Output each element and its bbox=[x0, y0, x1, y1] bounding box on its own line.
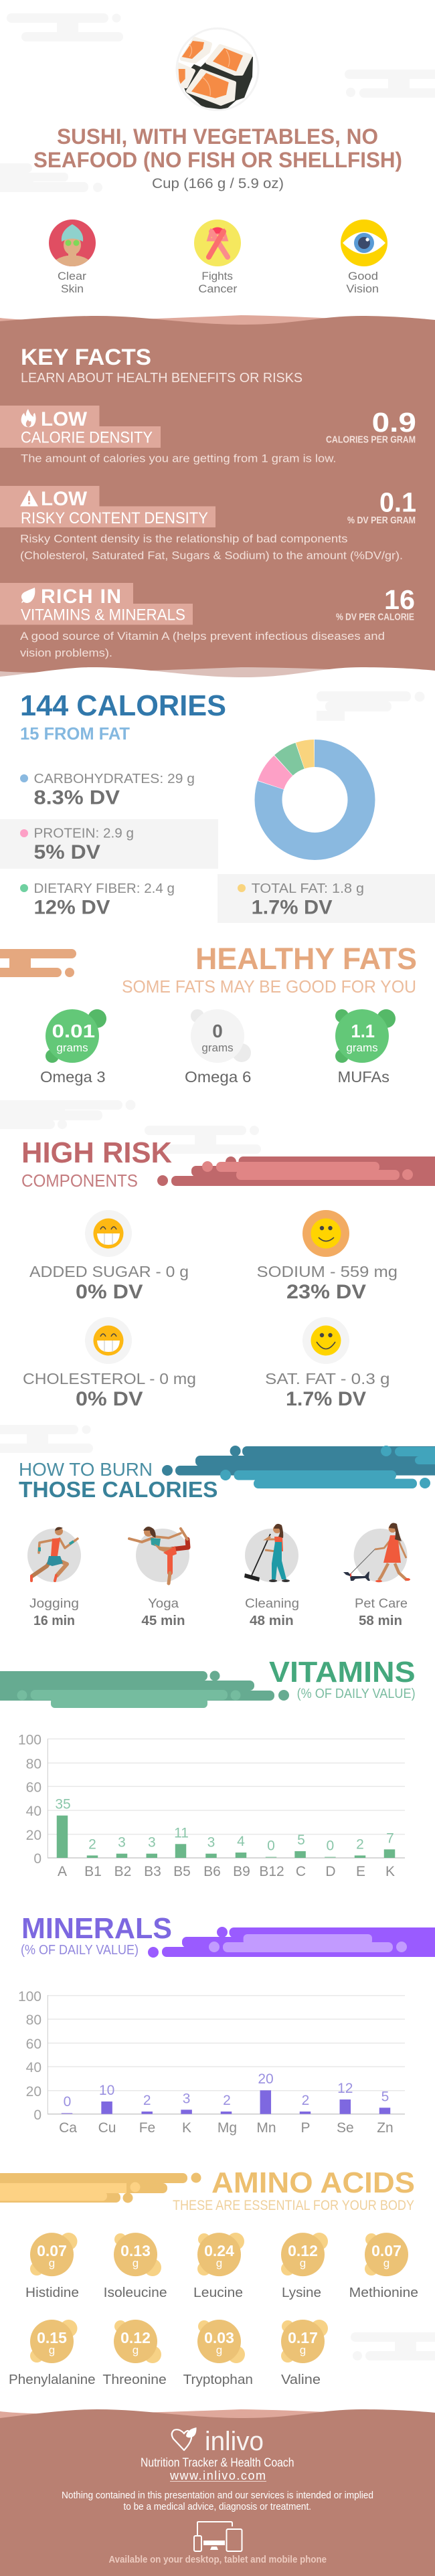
bar chart: vitamins: 60 bbox=[26, 1780, 41, 1795]
tagline: Nutrition Tracker & Health Coach bbox=[141, 2456, 294, 2470]
bar chart: vitamins: 11 bbox=[174, 1825, 189, 1840]
badge: omega 6 bbox=[185, 1009, 252, 1086]
badge: tryptophan: g bbox=[216, 2344, 222, 2356]
activity: cleaning bbox=[244, 1524, 299, 1628]
bar chart: vitamins: 0 bbox=[267, 1838, 275, 1853]
benefit: clear skin: Clear bbox=[58, 270, 86, 282]
background cloud: amino section bbox=[351, 2332, 435, 2360]
heading: minerals: MINERALS bbox=[21, 1912, 172, 1945]
bar chart: vitamins: 80 bbox=[26, 1756, 41, 1772]
background clouds: high risk bbox=[0, 1100, 261, 1154]
heading: high risk: HIGH RISK bbox=[21, 1136, 172, 1169]
activity: cleaning: 48 min bbox=[250, 1614, 294, 1628]
bar chart: vitamins: A bbox=[58, 1864, 67, 1879]
badge: MUFAs bbox=[335, 1009, 396, 1086]
fact: low risky content density: LOW bbox=[41, 488, 88, 510]
bar chart: vitamins: 3 bbox=[148, 1835, 156, 1851]
item: cholesterol: 0% DV bbox=[76, 1388, 143, 1410]
fact: low calorie density: CALORIES PER GRAM bbox=[326, 434, 416, 446]
badge: isoleucine: 0.13 bbox=[120, 2242, 151, 2259]
banner shape: orange bbox=[0, 949, 76, 977]
fact: rich in vitamins and minerals: vision problems). bbox=[20, 647, 112, 659]
item: cholesterol bbox=[23, 1317, 196, 1410]
nutrient shaded rows bbox=[0, 819, 435, 923]
badge: MUFAs: grams bbox=[346, 1041, 378, 1054]
badge: MUFAs: MUFAs bbox=[337, 1068, 389, 1086]
panel: calories bbox=[0, 690, 435, 923]
panel: vitamins bbox=[0, 1656, 416, 1879]
bar chart: minerals: Cu bbox=[98, 2120, 116, 2136]
bar chart: minerals: 10 bbox=[99, 2083, 114, 2098]
background cloud: burn section bbox=[0, 1425, 93, 1453]
bar chart: minerals: 20 bbox=[258, 2071, 274, 2087]
fact: low risky content density: RISKY CONTENT DENSITY bbox=[21, 509, 208, 527]
disclaimer: to be a medical advice, diagnosis or treatment. bbox=[123, 2502, 311, 2512]
legend: total fat: TOTAL FAT: 1.8 g bbox=[252, 881, 364, 896]
bar chart: minerals: Fe bbox=[139, 2120, 155, 2136]
bar chart: vitamins bbox=[18, 1732, 405, 1879]
bar chart: minerals: 20 bbox=[26, 2084, 41, 2099]
panel: footer bbox=[0, 2409, 435, 2576]
bar chart: vitamins: 35 bbox=[55, 1797, 71, 1812]
legend: total fat: 1.7% DV bbox=[252, 897, 333, 919]
badge: MUFAs: 1.1 bbox=[351, 1021, 375, 1041]
badge: methionine: g bbox=[383, 2257, 389, 2269]
fact: low calorie density: LOW bbox=[41, 408, 88, 430]
legend: dietary fiber: 12% DV bbox=[33, 897, 110, 919]
badge: omega 3: grams bbox=[56, 1041, 88, 1054]
activity: yoga bbox=[129, 1527, 189, 1628]
activity: pet care: Pet Care bbox=[355, 1597, 408, 1611]
item: cholesterol: CHOLESTEROL - 0 mg bbox=[23, 1370, 196, 1387]
legend: protein: 5% DV bbox=[33, 841, 100, 863]
badge: leucine: Leucine bbox=[193, 2286, 243, 2300]
heading: key facts: KEY FACTS bbox=[21, 345, 151, 370]
badge: threonine: Threonine bbox=[102, 2373, 167, 2387]
bar chart: minerals: 5 bbox=[381, 2089, 389, 2104]
banner shape: teal bbox=[162, 1446, 435, 1488]
item: saturated fat: 1.7% DV bbox=[286, 1388, 366, 1410]
bar chart: minerals: 2 bbox=[302, 2093, 309, 2108]
badge: phenylalanine: 0.15 bbox=[37, 2329, 67, 2346]
benefit: fights cancer: Cancer bbox=[198, 282, 238, 295]
badge: phenylalanine: g bbox=[49, 2344, 55, 2356]
bar chart: vitamins: 2 bbox=[356, 1836, 364, 1852]
bar chart: minerals: Se bbox=[337, 2120, 354, 2136]
fact: rich in vitamins and minerals: VITAMINS & MINERALS bbox=[21, 606, 185, 624]
disclaimer: Nothing contained in this presentation and our services is intended or implied bbox=[62, 2490, 373, 2501]
bar chart: vitamins: 7 bbox=[386, 1830, 394, 1846]
benefit: clear skin bbox=[48, 220, 96, 295]
bar chart: minerals: P bbox=[300, 2120, 311, 2136]
badge: threonine bbox=[102, 2320, 167, 2387]
badge: tryptophan bbox=[183, 2320, 253, 2387]
fact: low calorie density: 0.9 bbox=[372, 407, 416, 438]
banner shape: red bbox=[157, 1156, 435, 1186]
benefit: fights cancer: Fights bbox=[201, 270, 233, 282]
item: sodium bbox=[257, 1210, 398, 1303]
badge: leucine bbox=[193, 2233, 244, 2300]
badge: histidine bbox=[25, 2233, 79, 2300]
panel: how to burn those calories bbox=[19, 1446, 435, 1628]
bar chart: vitamins: B12 bbox=[259, 1864, 284, 1879]
bar chart: vitamins: B2 bbox=[114, 1864, 131, 1879]
heading: vitamins: VITAMINS bbox=[269, 1656, 416, 1689]
bar chart: minerals: 2 bbox=[223, 2093, 231, 2108]
bar chart: vitamins: 0 bbox=[327, 1838, 334, 1853]
badge: phenylalanine bbox=[9, 2320, 96, 2387]
panel: key facts bbox=[0, 315, 435, 683]
bar chart: minerals: 40 bbox=[26, 2060, 41, 2075]
badge: valine: 0.17 bbox=[288, 2329, 318, 2346]
fact: low calorie density: The amount of calories you are getting from 1 gram is low. bbox=[21, 452, 337, 465]
benefit: good vision: Vision bbox=[346, 282, 379, 295]
activity: jogging: Jogging bbox=[29, 1597, 79, 1611]
benefit: clear skin: Skin bbox=[61, 282, 84, 295]
badge: threonine: g bbox=[133, 2344, 139, 2356]
badge: omega 3 bbox=[40, 1009, 106, 1086]
badge: threonine: 0.12 bbox=[120, 2329, 151, 2346]
title bbox=[33, 124, 402, 172]
bar chart: vitamins: 3 bbox=[118, 1835, 126, 1851]
badge: tryptophan: 0.03 bbox=[204, 2329, 234, 2346]
bar chart: vitamins: B3 bbox=[144, 1864, 161, 1879]
bar chart: minerals: Zn bbox=[377, 2120, 394, 2136]
legend: dietary fiber: DIETARY FIBER: 2.4 g bbox=[33, 881, 175, 896]
badge: valine bbox=[281, 2320, 328, 2387]
badge: omega 3: 0.01 bbox=[52, 1021, 95, 1041]
fact: low risky content density: Risky Content density is the relationship of bad components bbox=[20, 533, 348, 545]
bar chart: vitamins: 40 bbox=[26, 1804, 41, 1819]
website link: www.inlivo.com bbox=[169, 2469, 266, 2482]
badge: isoleucine: Isoleucine bbox=[104, 2286, 167, 2300]
fact: low calorie density: CALORIE DENSITY bbox=[21, 428, 153, 447]
item: saturated fat: SAT. FAT - 0.3 g bbox=[265, 1370, 389, 1387]
activity: pet care bbox=[343, 1523, 410, 1628]
item: added sugar: ADDED SUGAR - 0 g bbox=[29, 1263, 189, 1280]
badge: leucine: g bbox=[216, 2257, 222, 2269]
heading: healthy fats: HEALTHY FATS bbox=[195, 942, 417, 976]
donut chart bbox=[268, 754, 361, 846]
heading: amino acids: AMINO ACIDS bbox=[211, 2166, 415, 2199]
bar chart: minerals: 60 bbox=[26, 2037, 41, 2052]
legend: protein bbox=[20, 827, 134, 863]
badge: lysine: 0.12 bbox=[288, 2242, 318, 2259]
bar chart: vitamins: B9 bbox=[233, 1864, 250, 1879]
badge: valine: Valine bbox=[281, 2373, 321, 2387]
bar chart: vitamins: B5 bbox=[173, 1864, 191, 1879]
bar chart: vitamins: E bbox=[356, 1864, 365, 1879]
logo: inlivo: inlivo bbox=[205, 2427, 264, 2456]
legend: carbohydrates bbox=[20, 772, 195, 808]
bar chart: minerals: Mn bbox=[256, 2120, 276, 2136]
legend: total fat bbox=[238, 881, 364, 919]
badge: lysine bbox=[281, 2233, 328, 2300]
panel: minerals bbox=[18, 1912, 435, 2136]
icon: devices bbox=[194, 2522, 242, 2551]
bar chart: minerals: 0 bbox=[64, 2094, 71, 2110]
benefit: good vision: Good bbox=[348, 270, 378, 282]
badge: tryptophan: Tryptophan bbox=[183, 2373, 253, 2387]
badge: leucine: 0.24 bbox=[204, 2242, 234, 2259]
fact: low risky content density bbox=[0, 486, 416, 562]
activity: cleaning: Cleaning bbox=[245, 1597, 299, 1611]
bar chart: minerals: 2 bbox=[143, 2093, 151, 2108]
bar chart: vitamins: B1 bbox=[84, 1864, 102, 1879]
food photo: sushi rolls bbox=[177, 28, 258, 110]
badge: omega 3: Omega 3 bbox=[40, 1068, 106, 1086]
title: SEAFOOD (NO FISH OR SHELLFISH) bbox=[33, 148, 402, 172]
legend: carbohydrates: CARBOHYDRATES: 29 g bbox=[33, 772, 195, 786]
heading: calories: 144 CALORIES bbox=[20, 690, 226, 722]
disclaimer bbox=[62, 2490, 373, 2512]
bar chart: vitamins: K bbox=[385, 1864, 395, 1879]
badge: omega 6: Omega 6 bbox=[185, 1068, 252, 1086]
heading: those calories: THOSE CALORIES bbox=[19, 1477, 218, 1502]
item: sodium: 23% DV bbox=[286, 1281, 366, 1303]
badge: methionine bbox=[349, 2233, 418, 2300]
bar chart: minerals: 3 bbox=[183, 2091, 190, 2106]
panel: amino acids bbox=[0, 2166, 418, 2387]
fact: rich in vitamins and minerals: A good source of Vitamin A (helps prevent infectious diseases and bbox=[20, 630, 385, 642]
fact: rich in vitamins and minerals: % DV PER CALORIE bbox=[336, 612, 414, 622]
bar chart: vitamins: 5 bbox=[297, 1832, 305, 1848]
activity: jogging bbox=[27, 1527, 81, 1628]
badge: histidine: g bbox=[49, 2257, 55, 2269]
badge: methionine: Methionine bbox=[349, 2286, 418, 2300]
bar chart: vitamins: 2 bbox=[88, 1836, 96, 1852]
bar chart: minerals bbox=[18, 1989, 405, 2136]
item: added sugar bbox=[29, 1210, 189, 1303]
fact: rich in vitamins and minerals: 16 bbox=[384, 584, 415, 615]
bar chart: vitamins: C bbox=[296, 1864, 306, 1879]
subheading: minerals percent of daily value: (% OF DAILY VALUE) bbox=[21, 1943, 139, 1958]
activity: yoga: 45 min bbox=[141, 1614, 185, 1628]
badge: valine: g bbox=[300, 2344, 306, 2356]
legend: dietary fiber bbox=[20, 881, 175, 919]
badge: isoleucine bbox=[104, 2233, 167, 2300]
fact: rich in vitamins and minerals: RICH IN bbox=[41, 586, 121, 608]
availability note: Available on your desktop, tablet and mobile phone bbox=[108, 2554, 327, 2565]
badge: histidine: Histidine bbox=[25, 2286, 79, 2300]
fact: low risky content density: 0.1 bbox=[379, 487, 416, 518]
legend: carbohydrates: 8.3% DV bbox=[33, 787, 120, 808]
activity: jogging: 16 min bbox=[33, 1614, 75, 1628]
bar chart: vitamins: 4 bbox=[237, 1834, 245, 1849]
subheading: vitamins percent of daily value: (% OF DAILY VALUE) bbox=[297, 1687, 416, 1701]
bar chart: minerals: 0 bbox=[33, 2108, 41, 2123]
serving size: Cup (166 g / 5.9 oz) bbox=[152, 176, 284, 191]
item: added sugar: 0% DV bbox=[76, 1281, 143, 1303]
banner shape: purple bbox=[148, 1927, 435, 1958]
bar chart: vitamins: 100 bbox=[18, 1732, 41, 1748]
bar chart: minerals: K bbox=[182, 2120, 191, 2136]
panel: high risk components bbox=[21, 1136, 435, 1410]
fact: low risky content density: (Cholesterol, Saturated Fat, Sugars & Sodium) to the amount (%DV/gr). bbox=[20, 549, 403, 562]
item: sodium: SODIUM - 559 mg bbox=[257, 1263, 398, 1280]
fact: low calorie density bbox=[0, 406, 416, 465]
bar chart: vitamins: 3 bbox=[207, 1835, 215, 1851]
heading: how to burn: HOW TO BURN bbox=[19, 1459, 153, 1480]
subheading: components: COMPONENTS bbox=[21, 1171, 138, 1191]
fact: low risky content density: % DV PER GRAM bbox=[347, 515, 416, 526]
banner shape: green bbox=[0, 1670, 289, 1708]
badge: histidine: 0.07 bbox=[37, 2242, 67, 2259]
panel: healthy fats bbox=[0, 942, 417, 1086]
title: SUSHI, WITH VEGETABLES, NO bbox=[57, 124, 378, 149]
badge: omega 6: grams bbox=[201, 1041, 234, 1054]
benefit: fights cancer bbox=[194, 220, 241, 295]
activity: yoga: Yoga bbox=[148, 1597, 179, 1611]
bar chart: vitamins: 0 bbox=[33, 1851, 41, 1867]
bar chart: minerals: 80 bbox=[26, 2012, 41, 2028]
bar chart: minerals: Ca bbox=[59, 2120, 77, 2136]
badge: methionine: 0.07 bbox=[371, 2242, 402, 2259]
bar chart: minerals: Mg bbox=[217, 2120, 237, 2136]
badge: isoleucine: g bbox=[133, 2257, 139, 2269]
fact: rich in vitamins and minerals bbox=[0, 583, 415, 659]
bar chart: vitamins: D bbox=[325, 1864, 336, 1879]
background clouds: header bbox=[0, 13, 435, 192]
legend: protein: PROTEIN: 2.9 g bbox=[33, 827, 134, 841]
badge: lysine: Lysine bbox=[282, 2286, 321, 2300]
item: saturated fat bbox=[265, 1317, 389, 1410]
bar chart: vitamins: B6 bbox=[203, 1864, 221, 1879]
subheading: key facts: LEARN ABOUT HEALTH BENEFITS OR RISKS bbox=[21, 371, 302, 385]
badge: omega 6: 0 bbox=[212, 1021, 223, 1041]
subheading: healthy fats: SOME FATS MAY BE GOOD FOR YOU bbox=[122, 976, 416, 997]
badge: phenylalanine: Phenylalanine bbox=[9, 2373, 96, 2387]
bar chart: minerals: 100 bbox=[18, 1989, 41, 2004]
benefit: good vision bbox=[341, 220, 387, 295]
activity: pet care: 58 min bbox=[359, 1614, 402, 1628]
subheading: calories from fat: 15 FROM FAT bbox=[20, 723, 130, 744]
logo: inlivo bbox=[172, 2427, 264, 2456]
banner shape: yellow bbox=[0, 2172, 201, 2203]
bar chart: minerals: 12 bbox=[337, 2081, 353, 2096]
bar chart: vitamins: 20 bbox=[26, 1828, 41, 1843]
badge: lysine: g bbox=[300, 2257, 306, 2269]
